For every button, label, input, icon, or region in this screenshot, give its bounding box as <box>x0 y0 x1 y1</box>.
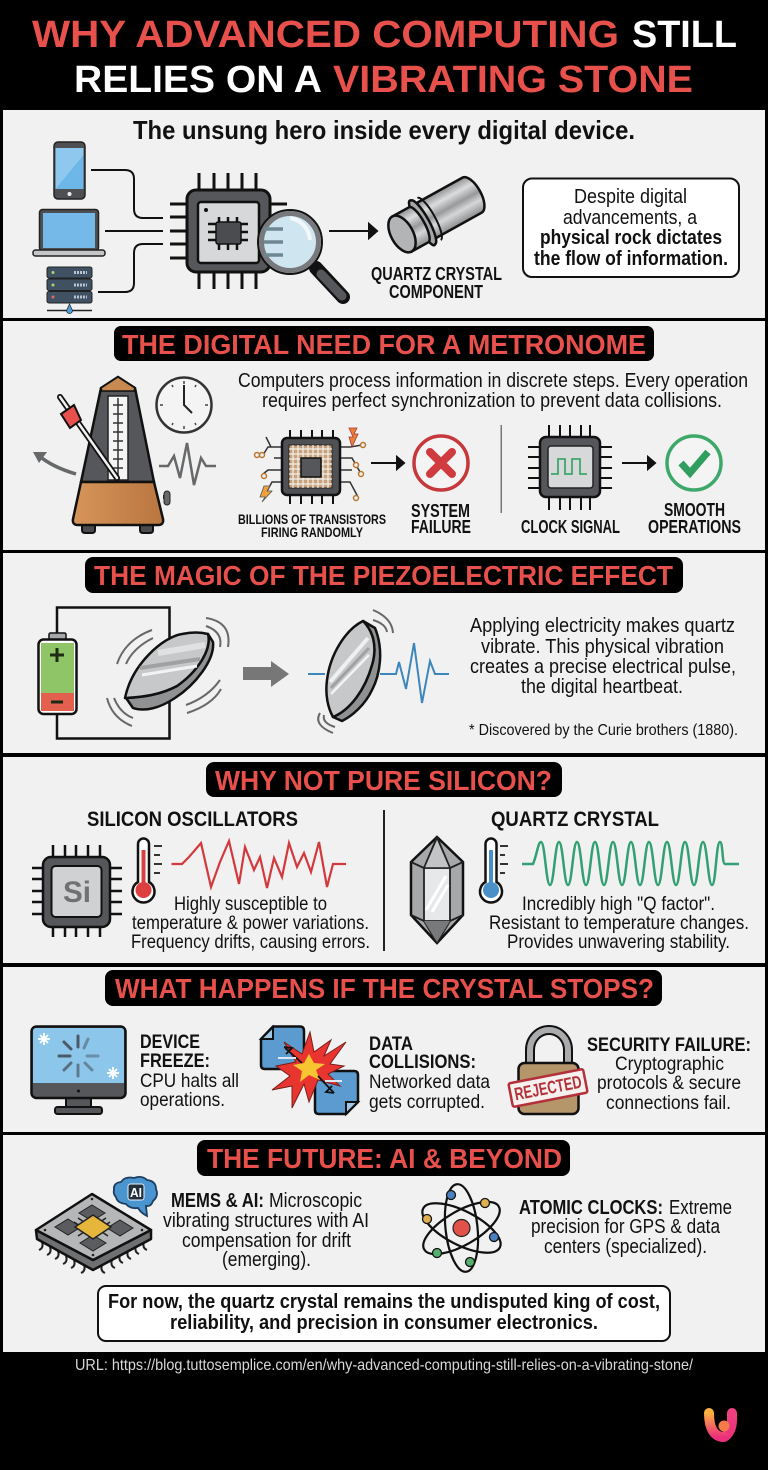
logo <box>709 1413 732 1437</box>
label: quartz crystal component: COMPONENT <box>389 282 483 302</box>
icon: locked padlock with rejected stamp: REJECTED <box>513 1072 583 1104</box>
callout: physical rock: the flow of information. <box>534 248 728 270</box>
heading: WHY NOT PURE SILICON? <box>215 765 552 796</box>
heading: WHAT HAPPENS IF THE CRYSTAL STOPS? <box>115 973 654 1004</box>
callout: physical rock: physical rock dictates <box>540 227 722 249</box>
label: clock signal: CLOCK SIGNAL <box>521 517 620 537</box>
description: requires perfect synchronization to prevent data collisions. <box>262 390 722 412</box>
text: MEMS and AI: vibrating structures with AI <box>163 1210 369 1232</box>
panel: piezoelectric effect <box>3 553 765 753</box>
icon: MEMS chip <box>36 1194 151 1273</box>
label: quartz crystal component: QUARTZ CRYSTAL <box>371 264 502 284</box>
description: the digital heartbeat. <box>521 676 683 698</box>
icon: frozen monitor <box>32 1026 126 1114</box>
label: smooth operations <box>648 500 741 537</box>
text: security failure: protocols & secure <box>597 1072 741 1094</box>
icon: quartz crystal <box>411 837 463 943</box>
icon: vibrating quartz disc <box>107 618 229 726</box>
description <box>470 615 736 698</box>
label: smooth operations: OPERATIONS <box>648 517 741 537</box>
text: quartz description <box>489 893 749 953</box>
description: creates a precise electrical pulse, <box>470 656 736 678</box>
text: security failure: connections fail. <box>606 1092 731 1114</box>
callout: conclusion: For now, the quartz crystal remains the undisputed king of cost, <box>108 1291 660 1313</box>
description: Applying electricity makes quartz <box>470 615 735 637</box>
subheading: silicon oscillators: SILICON OSCILLATORS <box>87 808 298 831</box>
icon: colliding data files <box>261 1026 358 1114</box>
icon: metronome <box>60 377 170 533</box>
title: STILL <box>632 14 737 56</box>
icon: AI brain <box>114 1177 157 1216</box>
connectors <box>91 170 163 292</box>
signal: noisy red wave <box>172 841 346 888</box>
callout: physical rock: Despite digital <box>574 186 687 208</box>
title: VIBRATING STONE <box>333 59 693 101</box>
arrow: swing <box>33 452 76 474</box>
pulse line <box>159 443 216 485</box>
icon: failure cross <box>414 436 468 490</box>
label: system failure: FAILURE <box>411 517 471 537</box>
subtitle: The unsung hero inside every digital device. <box>133 115 635 145</box>
icon: chaotic transistor chip <box>254 428 366 504</box>
panel: unsung hero <box>3 110 765 318</box>
text: MEMS and AI: MEMS & AI: <box>171 1190 264 1212</box>
text: silicon description <box>131 893 370 953</box>
text: device freeze: operations. <box>140 1089 225 1111</box>
text: device freeze: CPU halts all <box>140 1070 239 1092</box>
icon: clock signal chip <box>528 425 612 510</box>
icon: server stack <box>47 267 92 314</box>
icon: processor chip <box>170 173 287 289</box>
description <box>238 370 748 412</box>
text: MEMS and AI: Microscopic <box>269 1190 362 1212</box>
heading: THE FUTURE: AI & BEYOND <box>207 1143 562 1174</box>
text: data collisions: COLLISIONS: <box>369 1051 476 1073</box>
heading: THE DIGITAL NEED FOR A METRONOME <box>122 329 646 360</box>
text: device freeze: DEVICE <box>140 1031 200 1053</box>
label: system failure: SYSTEM <box>411 501 470 521</box>
icon: magnifying glass <box>258 210 343 297</box>
text: device freeze <box>140 1031 239 1111</box>
title: RELIES ON A <box>74 59 322 101</box>
label: smooth operations: SMOOTH <box>664 500 725 520</box>
text: MEMS and AI: compensation for drift <box>182 1230 351 1252</box>
icon: locked padlock with rejected stamp <box>508 1030 588 1114</box>
label: quartz crystal component <box>371 264 502 302</box>
circuit wire <box>57 608 170 738</box>
label: billions of transistors <box>238 511 386 540</box>
arrow <box>622 457 655 469</box>
icon: clock <box>156 378 212 432</box>
text: atomic clocks: precision for GPS & data <box>531 1216 721 1238</box>
callout: conclusion <box>98 1286 670 1341</box>
text: security failure: Cryptographic <box>615 1053 724 1075</box>
text: atomic clocks: ATOMIC CLOCKS: <box>519 1197 663 1219</box>
panel: why not silicon <box>3 757 765 963</box>
label: system failure <box>411 501 471 537</box>
heading: THE MAGIC OF THE PIEZOELECTRIC EFFECT <box>94 560 673 591</box>
arrow: grey <box>243 661 289 687</box>
text: data collisions <box>369 1033 490 1113</box>
footnote: * Discovered by the Curie brothers (1880). <box>469 722 738 739</box>
icon: laptop <box>33 210 105 256</box>
panel: crystal stops <box>3 967 765 1132</box>
icon: battery <box>38 633 76 714</box>
source URL: URL: https://blog.tuttosemplice.com/en/why-advanced-computing-still-relies-on-a-vibrating-stone/ <box>75 1357 693 1374</box>
text: MEMS and AI: (emerging). <box>222 1249 311 1271</box>
arrow <box>329 224 377 238</box>
icon: silicon chip: Si <box>63 876 91 909</box>
callout: conclusion: reliability, and precision in consumer electronics. <box>170 1312 598 1334</box>
title <box>32 14 737 101</box>
callout: physical rock <box>523 178 739 277</box>
label: billions of transistors: FIRING RANDOMLY <box>261 524 364 540</box>
text: device freeze: FREEZE: <box>140 1050 210 1072</box>
icon: atom <box>415 1183 508 1273</box>
text: quartz description: Incredibly high "Q factor". <box>522 893 715 915</box>
text: quartz description: Provides unwavering stability. <box>507 931 730 953</box>
icon: hot thermometer <box>132 838 162 903</box>
icon: cold thermometer <box>480 838 508 903</box>
panel: metronome <box>3 321 765 550</box>
callout: physical rock: advancements, a <box>563 207 698 229</box>
icon: AI brain: AI <box>130 1185 142 1200</box>
arrow <box>371 457 404 469</box>
text: atomic clocks: centers (specialized). <box>544 1236 707 1258</box>
icon: success check <box>667 436 721 490</box>
text: MEMS and AI <box>163 1190 369 1271</box>
panel: future <box>3 1135 765 1352</box>
text: silicon description: Highly susceptible to <box>174 893 327 915</box>
icon: quartz disc with pulse <box>308 610 449 733</box>
title: WHY ADVANCED COMPUTING <box>32 14 619 56</box>
signal: stable green wave <box>522 842 739 885</box>
text: data collisions: Networked data <box>369 1071 490 1093</box>
description: vibrate. This physical vibration <box>481 636 724 658</box>
text: silicon description: Frequency drifts, causing errors. <box>131 931 370 953</box>
icon: silicon chip <box>32 845 122 937</box>
icon: smartphone <box>54 142 85 199</box>
text: atomic clocks <box>519 1197 732 1258</box>
subheading: quartz crystal: QUARTZ CRYSTAL <box>491 808 659 831</box>
label: billions of transistors: BILLIONS OF TRANSISTORS <box>238 511 386 527</box>
text: security failure <box>587 1034 751 1114</box>
icon: quartz crystal can <box>380 169 492 262</box>
text: data collisions: DATA <box>369 1033 413 1055</box>
text: silicon description: temperature & power variations. <box>132 912 369 934</box>
text: data collisions: gets corrupted. <box>369 1091 485 1113</box>
text: atomic clocks: Extreme <box>669 1197 732 1219</box>
